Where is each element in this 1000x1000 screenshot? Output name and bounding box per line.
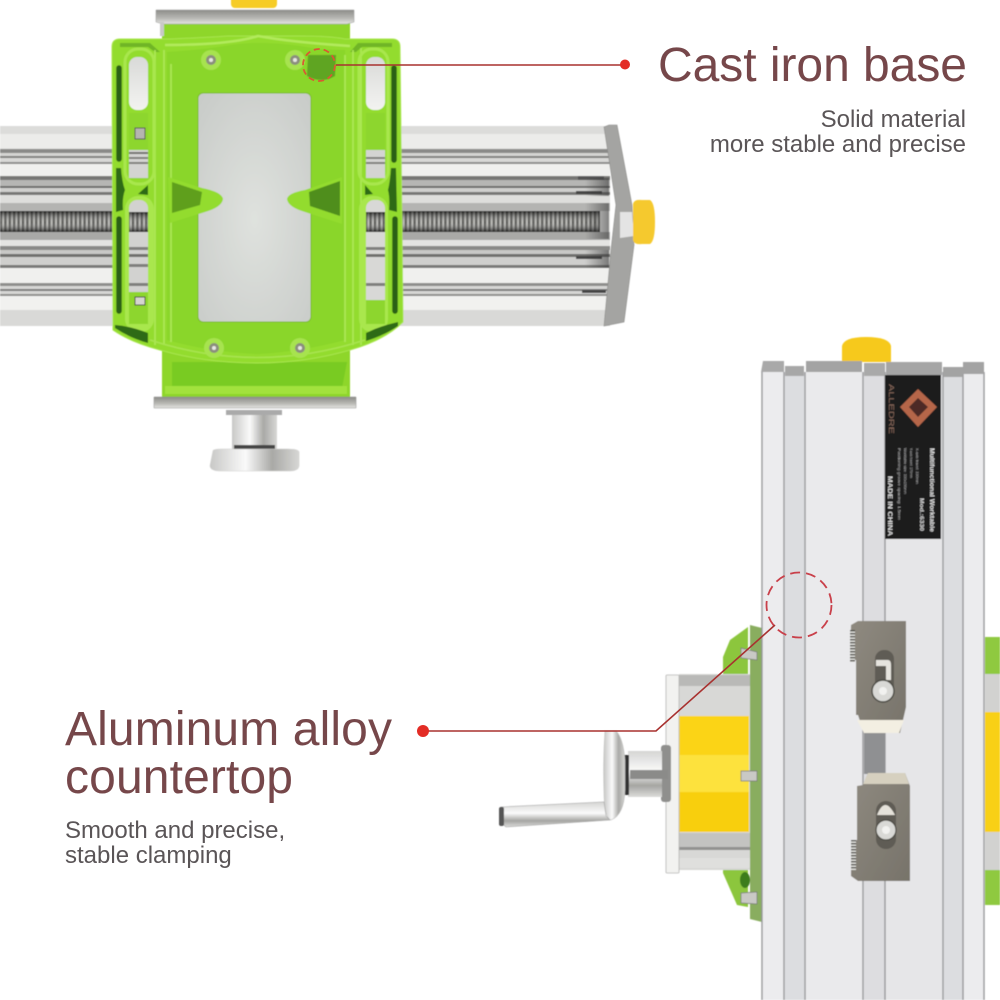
yellow knob right — [633, 200, 655, 244]
corner shadows — [115, 322, 398, 343]
leader line — [336, 64, 625, 66]
text block: cast iron description: Solid material — [821, 106, 966, 133]
dark window shapes by the slot joints — [116, 168, 397, 212]
dashed marker circle — [766, 572, 832, 638]
bottom knob — [210, 410, 299, 471]
spec line 2: Y-axis travel: 170mm — [909, 448, 913, 478]
yellow cap on column — [842, 337, 891, 362]
lower T-clamp — [851, 773, 910, 881]
black product label — [885, 375, 941, 539]
inner wall lines — [155, 48, 361, 345]
upper clamp shadow gap — [864, 733, 885, 774]
right green bracket — [287, 177, 342, 224]
left green bracket — [168, 177, 223, 223]
horizontal aluminium rail with lead screw — [0, 126, 610, 326]
top product photo: workbench seen from above — [0, 0, 655, 471]
lower back panel shading — [172, 362, 347, 388]
yellow lead block — [679, 716, 749, 832]
heading: Cast iron base: Cast iron base — [658, 39, 967, 92]
made in china: MADE IN CHINA — [886, 476, 892, 537]
right-side rail — [985, 674, 1000, 870]
top metal bar — [156, 10, 354, 24]
right-side green plate — [985, 637, 1000, 905]
frame top corner shading — [120, 43, 392, 52]
aluminium block top shading — [679, 675, 750, 686]
heading: countertop: countertop — [65, 751, 293, 804]
dark recess under callout — [307, 55, 336, 80]
green carriage — [723, 627, 748, 907]
dashed marker circle — [303, 49, 335, 81]
carriage dark holes — [740, 872, 750, 888]
bottom product photo: workbench side view — [499, 337, 1000, 1000]
orange logo diamond — [900, 389, 937, 427]
tray highlight — [165, 36, 350, 46]
spec line 4: Positioning groove spacing: 1.5mm — [897, 448, 901, 520]
upper T-clamp — [850, 621, 906, 733]
inner tray — [167, 43, 345, 354]
aluminium block lower shading — [679, 833, 750, 847]
right-side yellow block — [985, 712, 1000, 832]
end plate — [666, 675, 679, 873]
left bolts in slots — [135, 128, 145, 305]
back green body — [162, 20, 350, 398]
leader end dot — [417, 725, 429, 737]
callout: cast iron base pointer — [303, 49, 630, 81]
centre window — [198, 93, 311, 322]
bottom metal bar — [154, 397, 356, 408]
text block: cast iron description: more stable and precise — [710, 131, 966, 158]
aluminium block — [679, 674, 750, 870]
leader end dot — [620, 60, 630, 70]
screw on carriage — [741, 648, 757, 904]
hand wheel — [499, 731, 671, 827]
spec lines: X-axis travel: 330mm — [915, 448, 919, 484]
vertical aluminium column — [762, 372, 984, 1000]
text block: aluminum description: Smooth and precise, — [65, 817, 285, 844]
left bracket shadow — [172, 182, 202, 213]
left slots showing background — [125, 49, 154, 332]
green cast frame — [112, 36, 403, 363]
end plate highlight — [620, 212, 634, 238]
spec line 3: Worktable size: 330x190mm — [903, 448, 907, 494]
heading: Aluminum alloy: Aluminum alloy — [65, 703, 392, 756]
tray bottom rim — [150, 340, 365, 358]
top yellow knob — [231, 0, 277, 8]
right bracket shadow — [309, 181, 340, 216]
right slots showing background — [359, 49, 388, 332]
olive mounting band — [750, 625, 762, 922]
brand name: ALLEDRE — [887, 384, 894, 435]
text block: aluminum description: stable clamping — [65, 842, 232, 869]
column top caps — [761, 361, 984, 377]
callout: aluminum alloy pointer — [417, 572, 832, 737]
logo centre — [909, 398, 928, 417]
spec title: Multifunctional Worktable — [928, 448, 935, 532]
dark green side stripes — [119, 68, 395, 311]
leader line — [422, 625, 775, 731]
white side strip — [160, 22, 164, 36]
rail end plate — [604, 125, 634, 326]
spec model: Mod.:6330 — [918, 498, 924, 531]
mounting screws — [201, 50, 310, 358]
